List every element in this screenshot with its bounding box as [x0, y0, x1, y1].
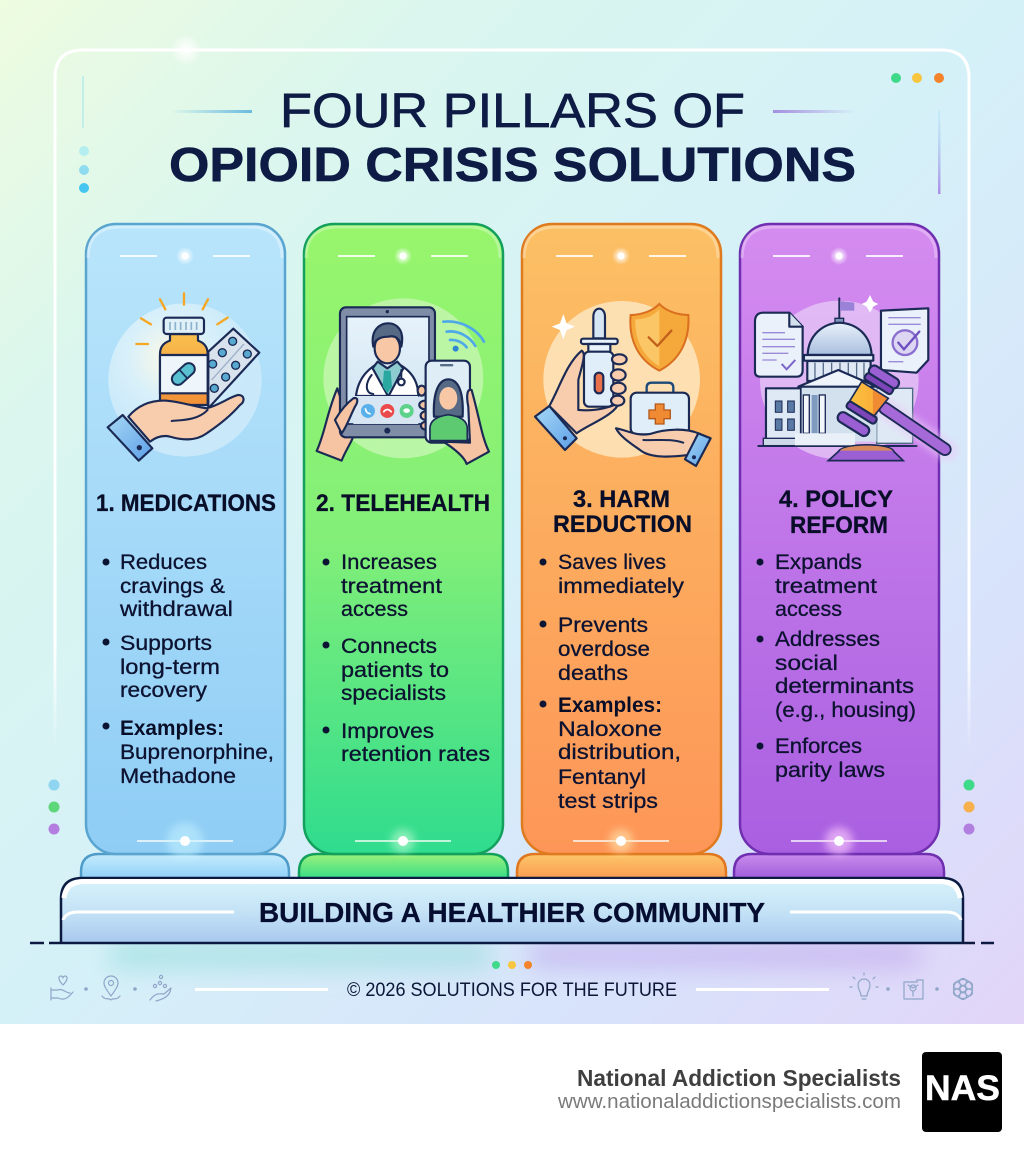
- banner text: BUILDING A HEALTHIER COMMUNITY: [259, 897, 765, 928]
- bullet list: treatment: [341, 575, 442, 598]
- dots: top right: [891, 73, 944, 83]
- bullet list: long-term: [120, 656, 220, 679]
- pedestal: column 1: [81, 854, 289, 879]
- icon: medication bottle on hand: [108, 293, 262, 461]
- base shadow: [110, 944, 920, 966]
- bullet list: (e.g., housing): [775, 699, 916, 722]
- bullet list: Improves: [341, 720, 434, 743]
- panel: medications: [86, 224, 285, 859]
- panel: telehealth: [304, 224, 503, 854]
- bullet list: Increases: [341, 551, 437, 574]
- title: OPIOID CRISIS SOLUTIONS: [169, 139, 856, 192]
- bullet list: distribution,: [558, 741, 681, 764]
- icon: hand with heart: [51, 976, 73, 1000]
- title: FOUR PILLARS OF: [280, 85, 745, 138]
- icon: hand with seeds: [150, 975, 171, 1001]
- decorative frame: [55, 34, 969, 750]
- heading: REDUCTION: [553, 511, 692, 538]
- bullet list: cravings &: [120, 575, 225, 598]
- bullet list: specialists: [341, 682, 446, 705]
- footer dots: [492, 961, 532, 969]
- icon: location pin: [102, 976, 120, 1000]
- logo: NAS: [925, 1069, 1000, 1108]
- heading: [779, 486, 893, 539]
- bullet list: Examples:: [120, 717, 224, 740]
- bullet list: Fentanyl: [558, 766, 646, 789]
- bullet list: deaths: [558, 662, 628, 685]
- icon: flower network: [954, 978, 972, 1000]
- bullet list: parity laws: [775, 759, 885, 782]
- bullet list: overdose: [558, 638, 650, 661]
- bullet list: Methadone: [120, 765, 236, 788]
- bullet list: social: [775, 652, 838, 675]
- bullet list: Expands: [775, 551, 862, 574]
- icon: capitol building, documents and gavel: [755, 295, 947, 461]
- white footer strip: [0, 1024, 1024, 1154]
- copyright: © 2026 SOLUTIONS FOR THE FUTURE: [347, 980, 677, 1001]
- icon: telehealth tablet and phone: [317, 298, 489, 464]
- logo: [922, 1052, 1002, 1132]
- organisation name: National Addiction Specialists: [577, 1065, 901, 1091]
- bullet list: treatment: [775, 575, 877, 598]
- bullet list: determinants: [775, 675, 914, 698]
- bullet list: [756, 551, 916, 782]
- bullet list: Connects: [341, 635, 437, 658]
- bullet list: Prevents: [558, 614, 648, 637]
- bullet list: immediately: [558, 575, 685, 598]
- bullet list: [540, 551, 685, 813]
- bullet list: Saves lives: [558, 551, 666, 574]
- bullet list: Supports: [120, 632, 212, 655]
- icon: naloxone spray, shield and first aid kit: [535, 301, 711, 466]
- organisation url: www.nationaladdictionspecialists.com: [557, 1091, 901, 1113]
- bullet list: access: [341, 598, 408, 621]
- pedestal: column 3: [517, 854, 726, 879]
- bullet list: Enforces: [775, 735, 862, 758]
- bullet list: [322, 551, 490, 766]
- dots: right side: [964, 780, 974, 834]
- bullet list: [102, 551, 274, 788]
- dots: top left: [79, 146, 89, 193]
- bullet list: withdrawal: [119, 598, 233, 621]
- bullet list: Reduces: [120, 551, 207, 574]
- heading: REFORM: [790, 512, 888, 539]
- bullet list: patients to: [341, 659, 449, 682]
- heading: [553, 486, 692, 538]
- dots: left side: [48, 780, 60, 834]
- bullet list: Naloxone: [558, 718, 662, 741]
- footer rules: [195, 988, 829, 991]
- footer separator dots: [84, 987, 939, 991]
- bullet list: access: [775, 598, 842, 621]
- panel: policy reform: [740, 224, 947, 855]
- heading: 4. POLICY: [779, 486, 893, 513]
- bullet list: retention rates: [341, 743, 490, 766]
- bullet list: Addresses: [775, 628, 880, 651]
- pedestal: column 4: [734, 854, 944, 879]
- title: [169, 85, 856, 192]
- icon: framed plant: [904, 980, 923, 999]
- bullet list: recovery: [120, 679, 208, 702]
- heading: 2. TELEHEALTH: [316, 490, 490, 517]
- icon: light bulb: [850, 973, 878, 999]
- heading: 3. HARM: [573, 486, 670, 513]
- bullet list: Examples:: [558, 694, 662, 717]
- panel: harm reduction: [522, 224, 721, 854]
- bullet list: test strips: [558, 790, 658, 813]
- bullet list: Buprenorphine,: [120, 741, 274, 764]
- pedestal: column 2: [299, 854, 508, 879]
- foundation banner: [30, 878, 994, 943]
- heading: 1. MEDICATIONS: [96, 490, 276, 517]
